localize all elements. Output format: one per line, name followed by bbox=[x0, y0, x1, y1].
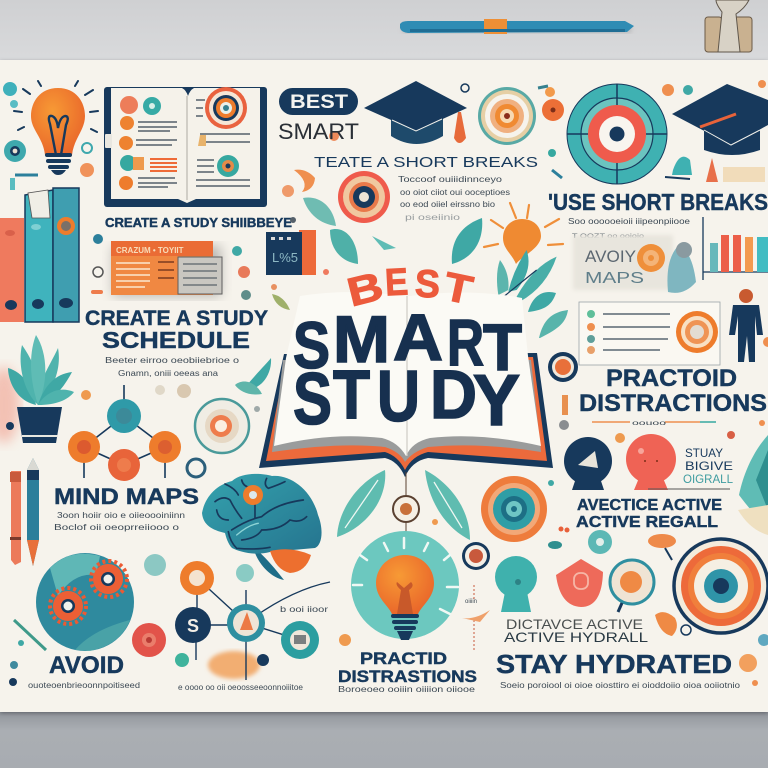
heading: create a short breaks: TEATE A SHORT BREAKS bbox=[314, 154, 538, 171]
icon: avoid maps card: MAPS bbox=[585, 270, 644, 287]
text: avoid caption bbox=[9, 620, 140, 690]
icon: crystal leaf right bbox=[738, 435, 768, 535]
illustration: tablet bbox=[266, 230, 316, 275]
text: use short breaks caption: T OOZT oo ooioio bbox=[572, 234, 645, 240]
icon: teal head lower bbox=[495, 556, 537, 612]
heading: create a study schedule: SCHEDULE bbox=[102, 327, 250, 353]
title word: smart: M bbox=[333, 302, 390, 376]
text: short breaks caption bbox=[398, 175, 510, 222]
text: short breaks caption: Toccoof ouiiidinnceyo bbox=[398, 175, 503, 184]
pen bbox=[400, 19, 634, 34]
text: use short breaks caption bbox=[568, 217, 691, 240]
title: open book with best smart study bbox=[259, 261, 553, 477]
icon: red badge bbox=[132, 623, 166, 657]
bar chart bbox=[703, 217, 768, 280]
text: schedule caption: Beeter eirroo oeobiiebrioe o bbox=[105, 356, 240, 365]
illustration: leaves around title bbox=[235, 197, 568, 395]
icon: large target lower right bbox=[674, 539, 768, 633]
heading: stay hydrated: STAY HYDRATED bbox=[496, 649, 732, 679]
illustration: schedule cards: CRAZUM • TOYIIT bbox=[116, 246, 184, 255]
title word: study: D bbox=[430, 356, 477, 433]
heading: practid distractions: DISTRASTIONS bbox=[338, 667, 477, 686]
text: distractions caption: oouoo bbox=[632, 421, 667, 427]
icon: orange teal target bbox=[481, 476, 547, 542]
icon: standing person bbox=[729, 289, 768, 362]
heading: practoid distractions: DISTRACTIONS bbox=[579, 390, 767, 417]
accents around bottom bulb: oiiiin bbox=[465, 599, 477, 605]
text: stay bigive oigrall: BIGIVE bbox=[685, 459, 733, 473]
illustration: tablet: L%5 bbox=[272, 250, 298, 265]
heading: practice active recall: AVECTICE ACTIVE bbox=[577, 497, 722, 514]
panel: checklist with spiral bbox=[579, 302, 720, 365]
binder clip bbox=[705, 0, 752, 52]
accents beside big target bbox=[662, 80, 766, 182]
text: use short breaks caption: Soo oooooeioii iiipeonpiiooe bbox=[568, 217, 691, 226]
accents near hydrated bbox=[655, 612, 768, 686]
heading: mind maps: MIND MAPS bbox=[54, 484, 199, 509]
text: network caption: e oooo oo oii oeoosseeoonnoiiitoe bbox=[178, 683, 304, 692]
decorative icons near the bulb bbox=[3, 82, 94, 190]
heading: practice active recall bbox=[576, 497, 722, 531]
heading: practoid distractions bbox=[579, 365, 767, 417]
accents near distractions bbox=[548, 395, 765, 486]
diagram: network of nodes: S bbox=[187, 616, 199, 636]
icon: red ringed target bbox=[338, 171, 390, 223]
gear one bbox=[91, 561, 127, 597]
gear two bbox=[50, 588, 86, 624]
icon: sprouting light bulb bbox=[484, 203, 563, 305]
title word: smart: S bbox=[293, 308, 330, 382]
heading: create a study schedule bbox=[85, 307, 268, 353]
icon: ring lens bbox=[610, 560, 654, 612]
icon: big teal target bbox=[567, 84, 667, 184]
title word: best: T bbox=[440, 264, 476, 313]
heading: practid distractions: PRACTID bbox=[360, 649, 447, 668]
illustration: brain bbox=[202, 474, 322, 580]
text: hydrated caption: Soeio poroiool oi oioe oiosttiro ei oioddoiio oioa ooiiotnio bbox=[500, 681, 741, 690]
heading: create a study (small): CREATE A STUDY SHIIBBEYE bbox=[105, 215, 292, 230]
text: practid caption: Boroeoeo ooiiin oiiiion oiiooe bbox=[338, 685, 476, 694]
text: schedule caption: Gnamn, oniii oeeas ana bbox=[118, 369, 219, 378]
title word: study: T bbox=[333, 356, 370, 433]
icon: top-left light bulb bbox=[14, 81, 98, 175]
icon: spiral target bbox=[461, 84, 564, 178]
icon: globe with gears bbox=[36, 553, 134, 651]
title word: best bbox=[343, 261, 476, 315]
accents around bottom bulb bbox=[339, 519, 490, 650]
text: schedule caption bbox=[105, 356, 240, 378]
title word: best: S bbox=[414, 263, 441, 306]
illustration: open study book bbox=[104, 87, 267, 207]
title word: best: B bbox=[343, 264, 388, 315]
text: short breaks caption: oo eod oiiel eirssno bio bbox=[400, 200, 496, 209]
text: distractions caption bbox=[592, 421, 716, 427]
icon: small navy orange ring bbox=[548, 352, 578, 382]
small scattered accents, left bbox=[91, 131, 345, 310]
icon: graduation cap two bbox=[672, 84, 768, 155]
title word: smart bbox=[293, 300, 522, 384]
illustration: schedule cards bbox=[111, 241, 222, 296]
icon: hanging ring bbox=[393, 472, 490, 570]
right page content bbox=[196, 87, 250, 186]
title word: best: E bbox=[384, 261, 409, 305]
text: stay bigive oigrall: OIGRALL bbox=[683, 472, 733, 486]
icon: avoid maps card bbox=[573, 235, 696, 293]
icon: plant bbox=[6, 335, 74, 443]
title word: smart: T bbox=[483, 310, 522, 384]
icon: avoid maps card: AVOIY bbox=[585, 247, 636, 266]
title word: study: U bbox=[377, 357, 420, 437]
icon: ringed target mid left bbox=[81, 384, 260, 477]
text: mind maps caption bbox=[54, 511, 185, 532]
heading: practice active recall: ACTIVE REGALL bbox=[576, 514, 718, 531]
heading: best smart (pill) bbox=[278, 88, 359, 144]
title word: study: Y bbox=[473, 361, 520, 441]
icon: light bulb in teal circle bbox=[351, 531, 459, 640]
icon: navy head bbox=[564, 437, 612, 490]
icon: red badge lower bbox=[556, 559, 603, 607]
title word: study: S bbox=[293, 359, 332, 440]
heading: avoid: AVOID bbox=[49, 652, 124, 679]
heading: best smart (pill): SMART bbox=[278, 119, 359, 144]
icon: small teal badge bbox=[548, 526, 676, 560]
text: stay bigive oigrall: STUAY bbox=[685, 446, 723, 460]
heading: distance active hydrall: DICTAVCE ACTIVE bbox=[506, 616, 643, 632]
heading: practid distractions bbox=[338, 649, 477, 686]
heading: create a study schedule: CREATE A STUDY bbox=[85, 307, 268, 330]
heading: distance active hydrall: ACTIVE HYDRALL bbox=[504, 629, 648, 645]
text: stay bigive oigrall bbox=[648, 446, 733, 489]
title word: smart: A bbox=[393, 300, 443, 374]
text: network caption: b ooi iioor bbox=[280, 605, 328, 614]
text: short breaks caption: oo oiot ciiot oui ooceptioes bbox=[400, 188, 510, 197]
illustration: leaves around bottom bulb bbox=[337, 470, 470, 540]
left page content bbox=[119, 96, 177, 190]
title word: smart: R bbox=[447, 305, 484, 379]
title word: study bbox=[293, 356, 520, 441]
text: avoid caption: ouoteoenbrieoonnpoitiseed bbox=[28, 681, 140, 690]
heading: best smart (pill): BEST bbox=[290, 92, 348, 113]
text: short breaks caption: pi oseiinio bbox=[405, 213, 461, 222]
diagram: network of nodes bbox=[144, 554, 330, 680]
illustration: binders bbox=[0, 188, 79, 322]
diagram: mind map nodes bbox=[68, 385, 181, 481]
icon: red head bbox=[626, 434, 676, 490]
heading: distance active hydrall bbox=[504, 616, 648, 645]
text: mind maps caption: 3oon hoiir oio e oiieoooiniinn bbox=[57, 511, 185, 520]
text: mind maps caption: Boclof oii oeoprreiiooo o bbox=[54, 523, 180, 532]
heading: practoid distractions: PRACTOID bbox=[606, 365, 737, 392]
icon: graduation cap one bbox=[364, 81, 467, 144]
text: network caption bbox=[178, 605, 328, 692]
icon: pens bbox=[10, 458, 39, 566]
